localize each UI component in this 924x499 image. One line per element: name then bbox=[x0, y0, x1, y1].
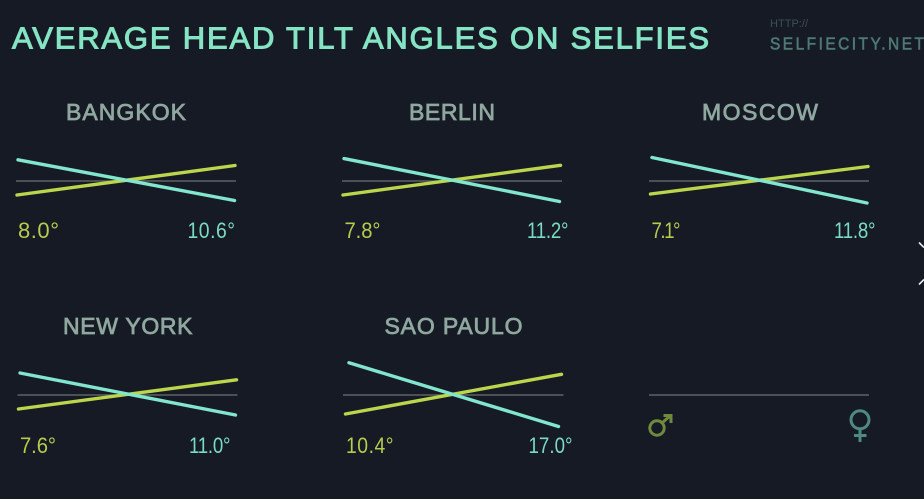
panel: Bangkok bbox=[16, 99, 236, 243]
icon: male symbol bbox=[650, 416, 671, 435]
panel: Sao Paulo bbox=[343, 313, 573, 458]
panel: Moscow: 7.1° bbox=[652, 220, 680, 243]
source link bbox=[770, 18, 924, 54]
panel: Bangkok: BANGKOK bbox=[66, 99, 187, 125]
title: AVERAGE HEAD TILT ANGLES ON SELFIES bbox=[12, 20, 709, 56]
panel: Moscow: 11.8° bbox=[834, 220, 875, 243]
panel: Sao Paulo: SAO PAULO bbox=[384, 313, 522, 339]
panel: New York: 7.6° bbox=[20, 434, 56, 458]
source link: HTTP:// bbox=[770, 18, 809, 30]
panel: New York: NEW YORK bbox=[63, 313, 193, 339]
panel: Bangkok: 8.0° bbox=[18, 218, 59, 243]
panel: Sao Paulo: 10.4° bbox=[346, 434, 394, 458]
panel: Berlin bbox=[342, 99, 568, 243]
panel: Moscow bbox=[649, 99, 875, 243]
legend bbox=[649, 395, 869, 442]
panel: Berlin: 11.2° bbox=[527, 220, 568, 243]
source link: SELFIECITY.NET bbox=[770, 33, 924, 54]
panel: Bangkok: 10.6° bbox=[188, 219, 235, 243]
panel: Sao Paulo: 17.0° bbox=[528, 435, 573, 458]
icon: female symbol bbox=[851, 411, 869, 442]
panel: New York bbox=[18, 313, 238, 458]
panel: New York: 11.0° bbox=[189, 435, 230, 458]
panel: Berlin: BERLIN bbox=[409, 99, 495, 125]
next arrow bbox=[919, 242, 924, 284]
panel: Moscow: MOSCOW bbox=[702, 99, 818, 125]
panel: Berlin: 7.8° bbox=[344, 219, 380, 243]
